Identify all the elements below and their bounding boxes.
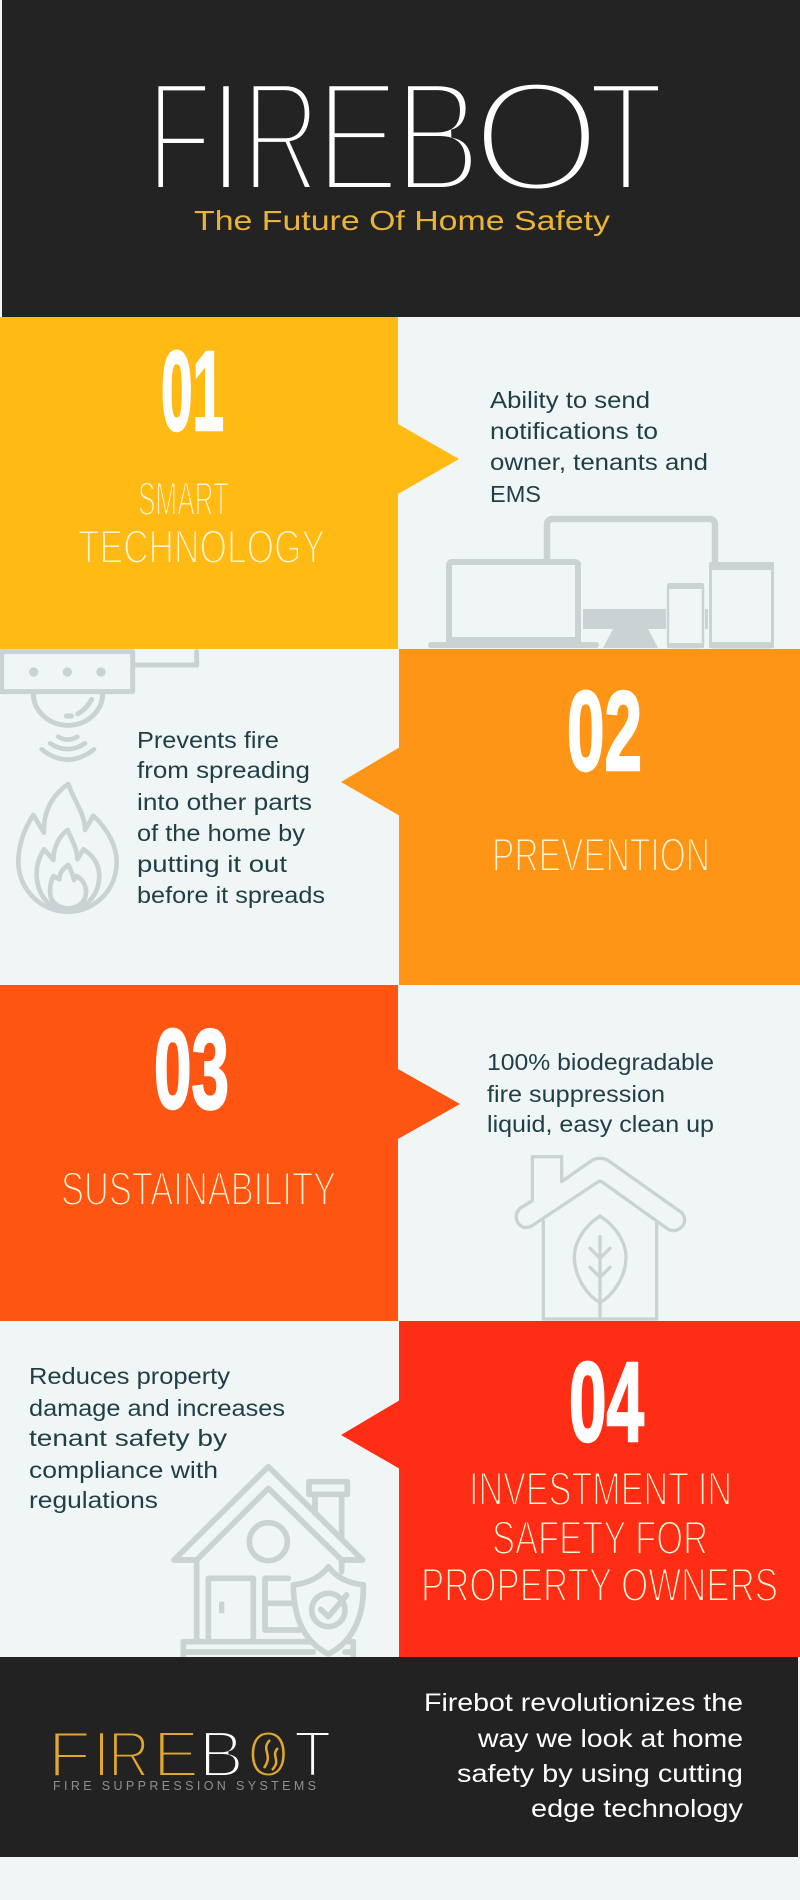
heading: smart technology: SMART bbox=[138, 473, 229, 526]
text: property damage: compliance with bbox=[29, 1457, 218, 1483]
text: prevents fire: of the home by bbox=[137, 820, 306, 846]
icon: eco house bbox=[516, 1157, 685, 1319]
heading: smart technology bbox=[78, 473, 325, 574]
icon: smoke detector and flame bbox=[2, 652, 197, 912]
heading: prevention: PREVENTION bbox=[492, 829, 710, 882]
text: property damage: damage and increases bbox=[29, 1395, 285, 1421]
title: B bbox=[394, 49, 481, 225]
panel: 03 sustainability bbox=[0, 985, 714, 1321]
title: O bbox=[472, 49, 601, 225]
text: biodegradable: fire suppression bbox=[487, 1081, 665, 1107]
footer logo: E bbox=[153, 1718, 199, 1790]
footer text: Firebot revolutionizes the bbox=[424, 1689, 743, 1717]
text: prevents fire bbox=[137, 727, 325, 908]
number 01: 01 bbox=[161, 328, 224, 454]
heading: smart technology: TECHNOLOGY bbox=[78, 521, 325, 574]
text: property damage bbox=[29, 1363, 285, 1513]
text: notifications: owner, tenants and bbox=[490, 449, 708, 475]
text: property damage: Reduces property bbox=[29, 1363, 231, 1389]
footer logo: I bbox=[92, 1718, 110, 1790]
text: biodegradable: 100% biodegradable bbox=[487, 1049, 714, 1075]
number 02: 02 bbox=[567, 668, 642, 794]
text: property damage: regulations bbox=[29, 1487, 158, 1513]
footer text: edge technology bbox=[531, 1795, 744, 1823]
arrow: 04 bbox=[341, 1400, 400, 1469]
footer logo: F bbox=[48, 1718, 91, 1790]
panel: 02 prevention bbox=[2, 649, 800, 985]
title: F bbox=[147, 49, 212, 225]
footer logo bbox=[48, 1718, 331, 1793]
title: R bbox=[242, 49, 320, 225]
footer text: way we look at home bbox=[477, 1725, 743, 1753]
text: biodegradable bbox=[487, 1049, 714, 1137]
text: notifications: EMS bbox=[490, 481, 541, 507]
heading: sustainability: SUSTAINABILITY bbox=[61, 1163, 336, 1216]
number 04: 04 bbox=[569, 1339, 644, 1465]
icon: devices bbox=[428, 519, 774, 648]
text: prevents fire: putting it out bbox=[137, 851, 288, 877]
panel: 04 investment bbox=[29, 1321, 800, 1657]
text: prevents fire: before it spreads bbox=[137, 882, 325, 908]
title: E bbox=[316, 49, 399, 225]
text: prevents fire: from spreading bbox=[137, 757, 310, 783]
text: biodegradable: liquid, easy clean up bbox=[487, 1111, 714, 1137]
panel: footer bbox=[0, 1657, 798, 1857]
text: prevents fire: into other parts bbox=[137, 789, 312, 815]
subtitle: The Future Of Home Safety bbox=[194, 205, 610, 236]
footer logo: R bbox=[108, 1718, 150, 1790]
footer text bbox=[424, 1689, 744, 1823]
title: I bbox=[208, 49, 244, 225]
arrow: 03 bbox=[398, 1069, 460, 1139]
panel: header bbox=[2, 0, 800, 317]
icon: house with shield bbox=[174, 1467, 363, 1657]
panel: 01 smart technology bbox=[0, 317, 774, 649]
footer text: safety by using cutting bbox=[457, 1760, 743, 1788]
icon: logo flame bbox=[264, 1740, 278, 1770]
logo tagline: FIRE SUPPRESSION SYSTEMS bbox=[53, 1779, 316, 1793]
arrow: 01 bbox=[398, 424, 459, 494]
number 03: 03 bbox=[154, 1006, 229, 1132]
text: prevents fire: Prevents fire bbox=[137, 727, 279, 753]
arrow: 02 bbox=[341, 747, 400, 816]
heading: investment in safety: SAFETY FOR bbox=[492, 1512, 708, 1565]
text: notifications: notifications to bbox=[490, 418, 658, 444]
text: notifications bbox=[490, 387, 708, 507]
title: T bbox=[588, 49, 664, 225]
text: property damage: tenant safety by bbox=[29, 1425, 228, 1451]
text: notifications: Ability to send bbox=[490, 387, 650, 413]
footer logo: O bbox=[248, 1718, 288, 1790]
footer logo: T bbox=[294, 1718, 331, 1790]
footer logo: B bbox=[199, 1718, 244, 1790]
heading: investment in safety bbox=[421, 1463, 778, 1612]
